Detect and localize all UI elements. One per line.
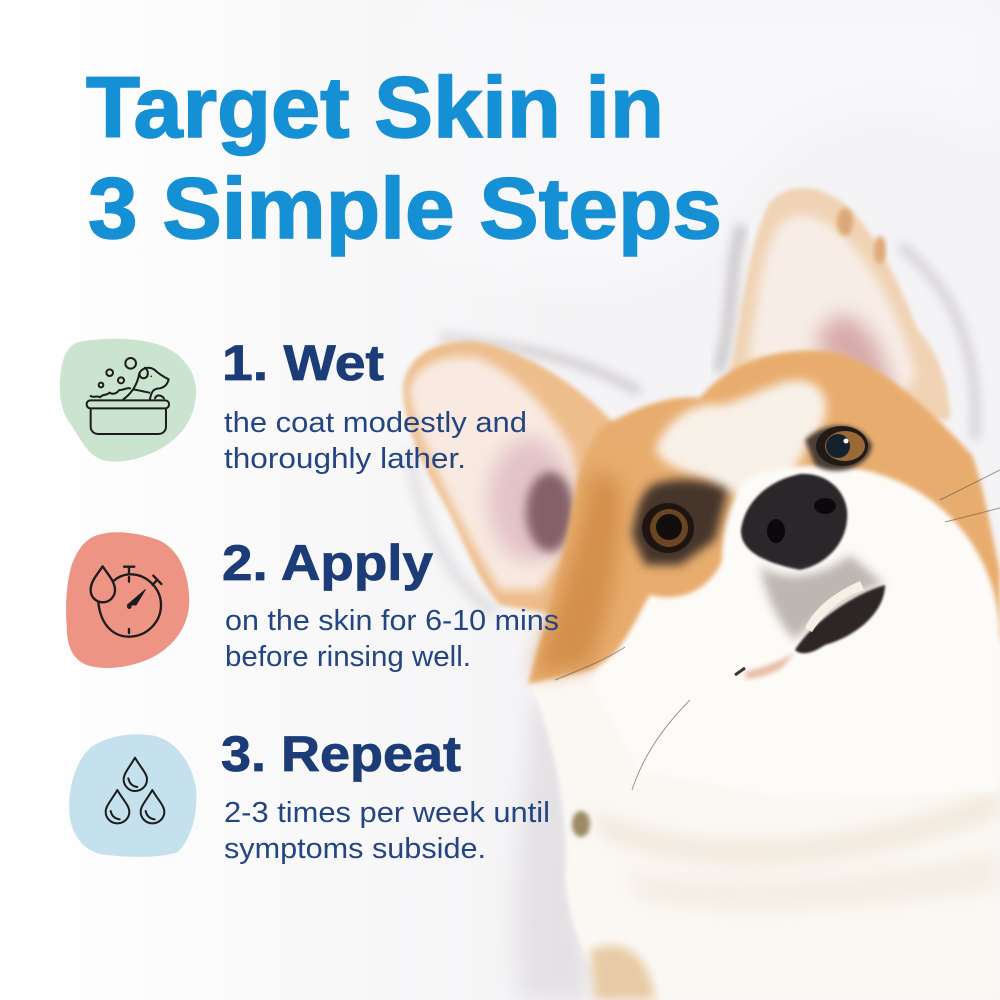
title: 3 Simple Steps [88,161,722,257]
head: orange fur [528,350,1000,684]
photo: corgi lying on its back [403,188,1000,1000]
step 1 description: thoroughly lather. [224,443,466,475]
step 2 description: before rinsing well. [225,641,471,673]
step 1 heading: 1. Wet [222,335,384,391]
step 3 heading: 3. Repeat [221,726,461,782]
body: white fur [530,560,1000,1000]
left eye [642,503,694,553]
step 2 heading: 2. Apply [222,535,433,591]
eye patches [632,480,728,565]
step 2 icon: droplet and stopwatch on coral blob [66,532,189,668]
right ear [728,188,950,420]
title [86,60,722,257]
step 2 description: on the skin for 6-10 mins [225,605,559,637]
step 1 icon: dog in bath on green blob [60,339,196,462]
step 3 description: symptoms subside. [224,833,486,865]
step 1 description: the coat modestly and [224,407,527,439]
step 2 description [225,605,559,673]
step 3 icon: three water drops on blue blob [69,734,196,857]
muzzle and chest: white fur [590,466,1000,800]
nose [741,474,847,570]
muzzle shading [760,555,885,640]
step 1 description [224,407,527,475]
step 3 description: 2-3 times per week until [224,797,550,829]
left ear [403,341,620,620]
step 3 description [224,797,550,865]
mouth and teeth [795,585,885,653]
right eye [816,426,868,466]
title: Target Skin in [86,60,664,156]
head: white forehead markings [655,380,826,500]
whiskers [555,470,1000,790]
